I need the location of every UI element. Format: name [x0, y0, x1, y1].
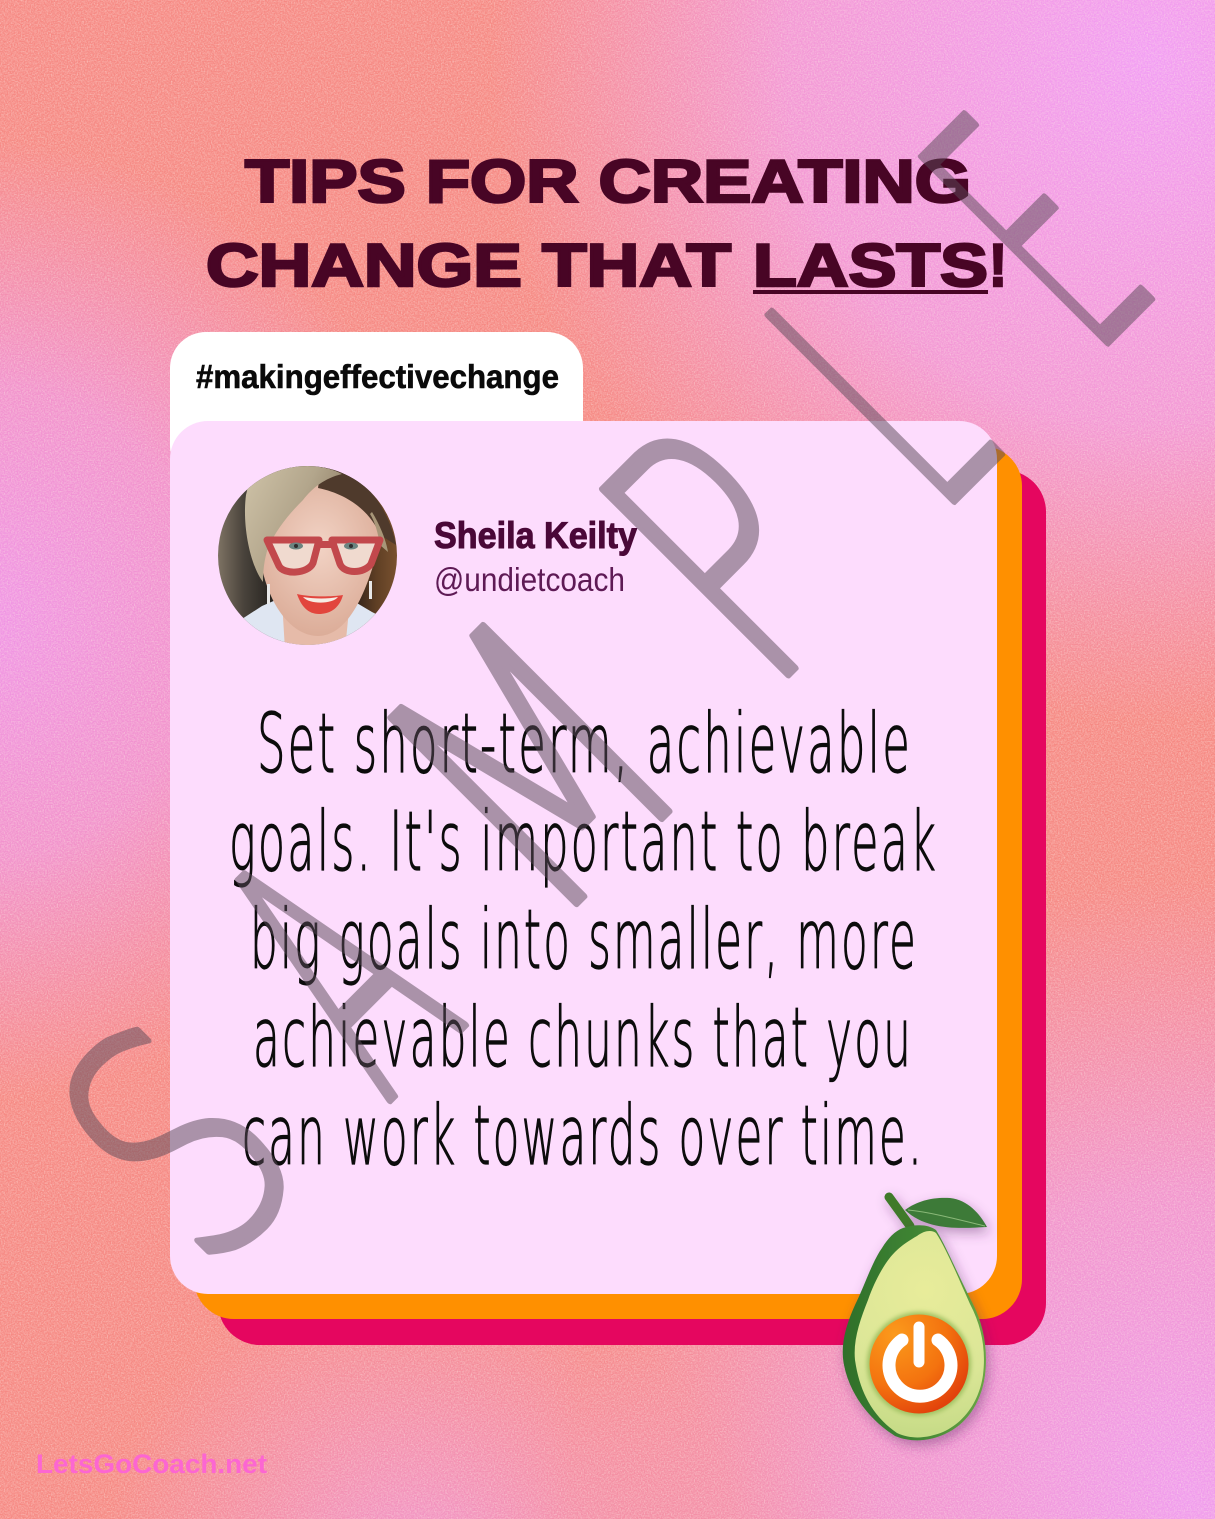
- sample watermark: M: [311, 546, 758, 992]
- avatar photo: [218, 462, 398, 650]
- hashtag text: #makingeffectivechange: [196, 358, 559, 395]
- title: CHANGE THAT: [206, 232, 731, 299]
- main quote text: [229, 697, 938, 1184]
- title: TIPS FOR CREATING: [245, 148, 971, 215]
- sample watermark: E: [858, 53, 1215, 418]
- panel: orange middle layer: [194, 446, 1022, 1319]
- icon: avocado with power button: [843, 1197, 987, 1440]
- title: !: [989, 232, 1007, 299]
- power symbol: [889, 1327, 951, 1396]
- sample watermark: S: [0, 957, 369, 1334]
- sample watermark: L: [702, 213, 1066, 577]
- footer website: LetsGoCoach.net: [36, 1449, 267, 1479]
- sample watermark: P: [531, 358, 928, 756]
- panel: crimson back layer: [218, 470, 1046, 1345]
- author name: Sheila Keilty: [434, 515, 637, 556]
- sample watermark: A: [149, 783, 530, 1165]
- panel: main card: [170, 421, 997, 1294]
- title: [206, 148, 1007, 299]
- power button disc: [867, 1312, 971, 1416]
- glasses: [267, 540, 380, 572]
- avocado flesh: [855, 1231, 984, 1437]
- stem and leaf: [889, 1197, 987, 1228]
- title: LASTS: [753, 232, 988, 299]
- author handle: @undietcoach: [434, 561, 625, 598]
- avocado body: [843, 1225, 986, 1440]
- tab: hashtag: [170, 332, 583, 482]
